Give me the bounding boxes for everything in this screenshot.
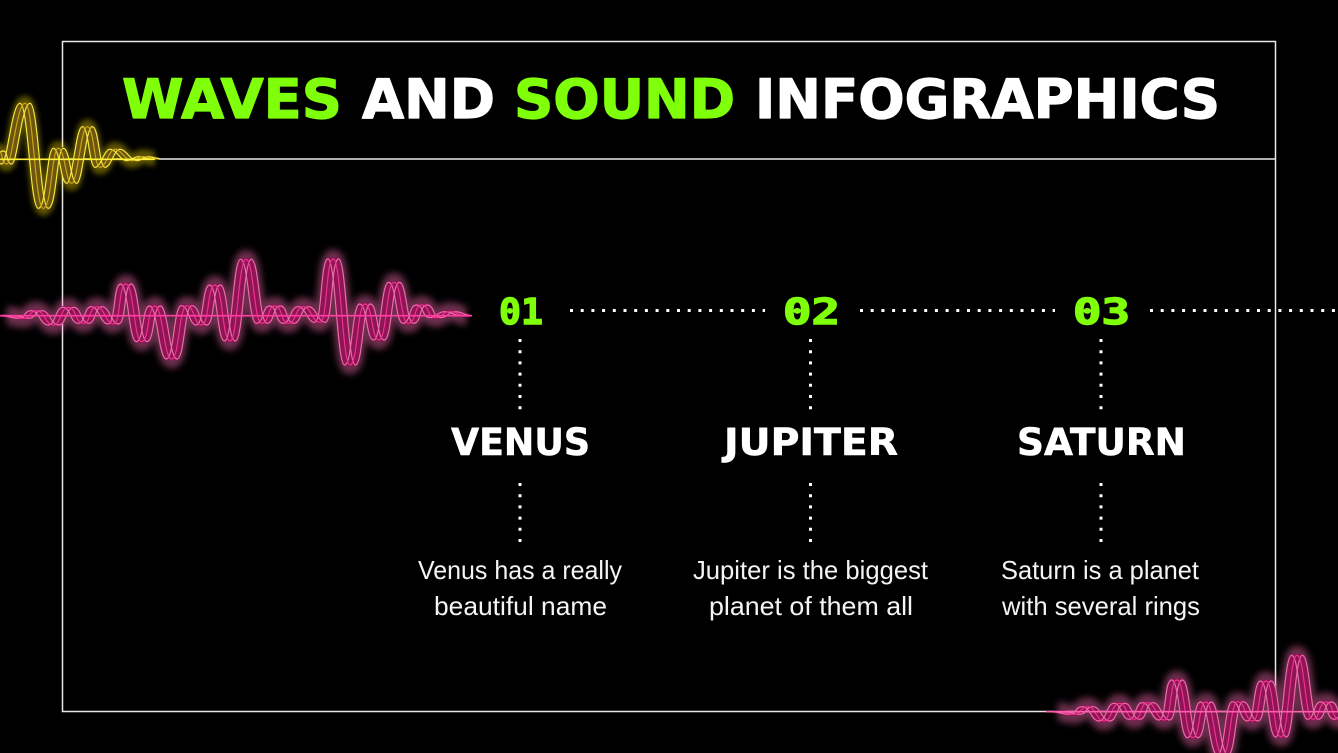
title: WAVES	[122, 68, 342, 131]
title: INFOGRAPHICS	[755, 68, 1220, 131]
connector dots to edge	[1150, 309, 1338, 312]
description: with several rings	[1001, 591, 1200, 621]
name: SATURN	[1017, 421, 1186, 464]
number 02: 02	[783, 292, 840, 333]
connector dots to description	[809, 483, 812, 542]
description: planet of them all	[709, 591, 913, 621]
connector dots to 02	[570, 309, 765, 312]
description: beautiful name	[434, 591, 607, 621]
title: SOUND	[514, 68, 735, 131]
column: Venus	[418, 292, 765, 621]
name: JUPITER	[721, 421, 898, 464]
column: Saturn	[1001, 292, 1338, 621]
connector dots to description	[518, 483, 522, 542]
name: VENUS	[451, 421, 590, 464]
description: Saturn is a planet	[1001, 555, 1200, 585]
description: Jupiter is the biggest	[693, 555, 929, 585]
description: Venus has a really	[418, 555, 622, 585]
number 03: 03	[1073, 292, 1130, 333]
connector dots to 03	[860, 309, 1055, 312]
connector dots to name	[518, 339, 522, 410]
number 01: 01	[499, 292, 543, 333]
connector dots to name	[1100, 339, 1102, 410]
column: Jupiter	[693, 292, 1055, 621]
title: AND	[362, 68, 495, 131]
icon: pink sound wave left	[0, 259, 472, 365]
connector dots to name	[809, 339, 812, 410]
icon: yellow sound wave	[0, 103, 160, 208]
icon: pink sound wave bottom right	[1046, 655, 1338, 753]
connector dots to description	[1100, 483, 1102, 542]
